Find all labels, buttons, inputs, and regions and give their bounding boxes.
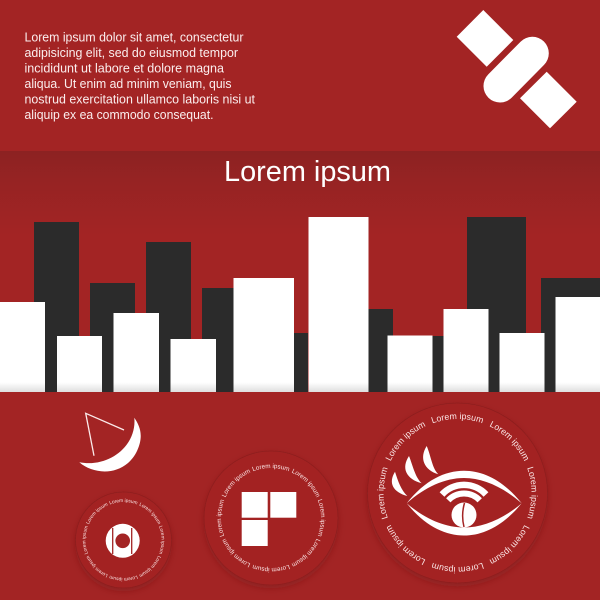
badge disc [204,451,338,585]
badge: ring [74,492,173,592]
badge disc [76,492,172,588]
intro text block: aliquip ex ea commodo consequat. [24,108,214,122]
icon: satellite [457,10,577,128]
badge: squares [202,450,340,590]
ring text: Lorem ipsum Lorem ipsum Lorem ipsum Lorem ipsum Lorem ipsum Lorem ipsum Lorem ipsum Lorem ipsum [216,464,326,572]
intro text block: aliqua. Ut enim ad minim veniam, quis [24,77,232,91]
white bars [0,217,600,392]
ring text: Lorem ipsum Lorem ipsum Lorem ipsum Lorem ipsum Lorem ipsum Lorem ipsum Lorem ipsum Lorem ipsum [82,498,165,582]
dark bars [34,217,600,392]
intro text block: Lorem ipsum dolor sit amet, consectetur [24,30,244,44]
badge disc [368,403,548,583]
icon: circle with hole [106,524,140,558]
badge: eye [366,402,549,588]
intro text block [24,30,256,122]
chart panel background [0,151,600,392]
icon: eye with wifi [392,446,522,536]
intro text block: incididunt ut labore et dolore magna [24,62,224,76]
icon: three squares [242,492,296,546]
icon: satellite dish [79,413,141,471]
ring text: Lorem ipsum Lorem ipsum Lorem ipsum Lorem ipsum Lorem ipsum Lorem ipsum Lorem ipsum Lorem ipsum [377,412,538,574]
intro text block: nostrud exercitation ullamco laboris nisi ut [24,92,256,106]
intro text block: adipisicing elit, sed do eiusmod tempor [24,46,238,60]
title: Lorem ipsum [224,156,391,188]
bar chart [0,217,600,392]
